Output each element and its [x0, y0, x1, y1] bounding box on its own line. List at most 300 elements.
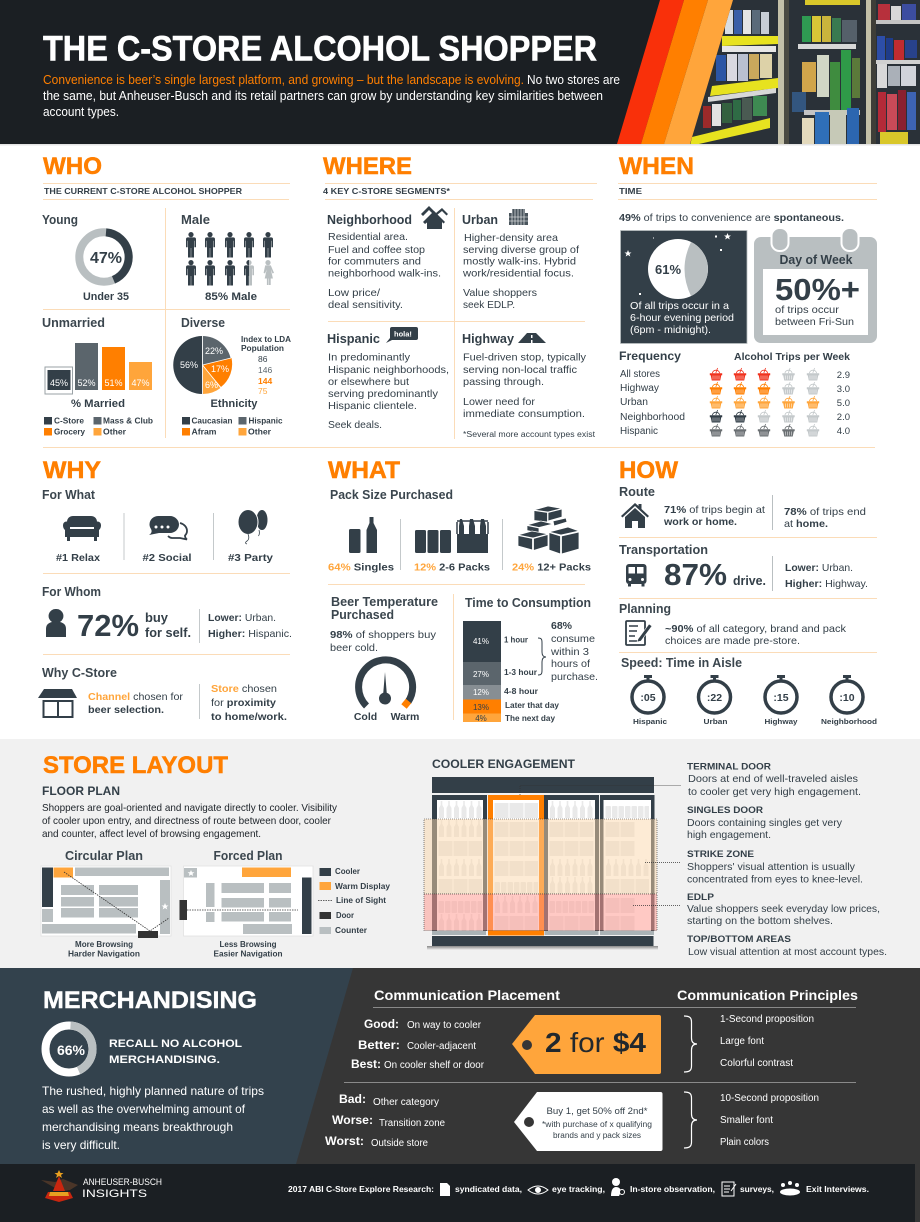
male pictogram: Male: [181, 213, 210, 227]
forced plan: Forced Plan: [214, 849, 282, 863]
icon: chat bubbles: [149, 516, 187, 540]
time to consumption: Time to Consumption: [465, 596, 591, 610]
bar chart: percent married: Unmarried: [42, 316, 105, 330]
icon: house: [621, 503, 649, 528]
calendar card: of trips occur: [775, 304, 840, 316]
intro text: Convenience is beer’s single largest platform, and growing – but the landscape is evolving.: [43, 72, 524, 87]
segment: urban: Value shoppers: [463, 288, 537, 299]
segment: urban: seek EDLP.: [463, 300, 515, 311]
calendar card: Day of Week: [780, 253, 853, 267]
time to consumption: The next day: [505, 714, 556, 723]
cooler callouts: TOP/BOTTOM AREAS: [687, 934, 791, 945]
segment: hispanic: [327, 327, 449, 431]
speed: time in aisle: :05: [640, 692, 656, 704]
heading: store layout: STORE LAYOUT: [43, 752, 228, 779]
panel: store layout: [0, 739, 920, 968]
icon: sofa: [63, 516, 101, 541]
stripe: light orange: [664, 0, 733, 144]
beer temperature: beer cold.: [330, 642, 378, 654]
frequency table: 5.0: [837, 398, 850, 409]
beer temperature: [330, 595, 438, 723]
route: at home.: [784, 518, 828, 530]
merchandising text: is very difficult.: [42, 1138, 120, 1152]
segment: highway: serving non-local traffic: [463, 365, 577, 376]
cooler callouts: Doors containing singles get very: [687, 818, 843, 829]
cooler callouts: TERMINAL DOOR: [687, 762, 771, 772]
panel: merchandising: [0, 968, 920, 1222]
segment: neighborhood: deal sensitivity.: [328, 300, 403, 311]
research sources: surveys,: [740, 1185, 774, 1194]
panel: WHY: For What: [42, 488, 96, 502]
young donut: 47%: [90, 250, 122, 267]
legend: Other: [103, 428, 126, 436]
panel: WHO: [42, 153, 291, 438]
segment: highway: Highway: [462, 331, 515, 346]
segment: hispanic: Hispanic clientele.: [328, 401, 417, 412]
evening card: (6pm - midnight).: [630, 324, 711, 336]
pie chart: ethnicity: Diverse: [181, 316, 225, 330]
icon: observer: [611, 1178, 624, 1196]
young donut: [42, 213, 129, 303]
route: Route: [619, 485, 655, 499]
icon: bus: [626, 564, 646, 586]
shelves: door 3: [549, 800, 594, 931]
pie chart: ethnicity: 56%: [180, 360, 198, 370]
planning: [619, 602, 847, 647]
spontaneous stat: 49% of trips to convenience are spontaneous.: [619, 212, 844, 224]
cooler callouts: Shoppers' visual attention is usually: [687, 862, 856, 873]
segment: neighborhood: Neighborhood: [327, 212, 412, 227]
icon: storefront: [38, 689, 77, 717]
stacked bar: 13%: [473, 703, 489, 712]
panel: WHAT: 24% 12+ Packs: [512, 562, 591, 574]
segment: neighborhood: for commuters and: [328, 256, 421, 268]
speed: time in aisle: Highway: [764, 717, 798, 726]
panel: WHAT: [328, 457, 598, 723]
strike zone overlay: [424, 819, 657, 894]
panel: WHEN: [618, 153, 877, 437]
heading: WHEN: WHEN: [619, 153, 694, 180]
intro text: No two stores are: [527, 72, 620, 87]
icon: balloons: [238, 510, 268, 544]
cooler callouts: [687, 762, 887, 958]
legend: [44, 416, 153, 436]
forced plan: Less Browsing: [220, 940, 277, 949]
cooler callouts: Doors at end of well-traveled aisles: [688, 774, 858, 785]
transportation: Transportation: [619, 543, 708, 557]
floor plan description: of cooler upon entry, and directness of route between door, cooler: [42, 816, 332, 827]
bad placement list: Bad:: [339, 1092, 366, 1106]
bar chart: percent married: 45%: [50, 378, 68, 388]
cooler callouts: starting on the bottom shelves.: [687, 916, 833, 927]
frequency table: Alcohol Trips per Week: [734, 352, 850, 363]
principles: weak: [720, 1093, 819, 1148]
heading: WHY: WHY: [43, 457, 101, 484]
segment: hispanic: In predominantly: [328, 352, 411, 364]
transportation: Higher: Highway.: [785, 578, 868, 590]
speed: time in aisle: Hispanic: [633, 717, 667, 726]
legend: Grocery: [54, 428, 86, 436]
principles: strong: Colorful contrast: [720, 1058, 793, 1069]
legend: Caucasian: [192, 416, 233, 426]
principles: strong: [720, 1014, 814, 1069]
why c-store: Store chosen: [211, 683, 277, 695]
time to consumption: 68%: [551, 620, 573, 632]
photo of cooler doors: [685, 0, 920, 146]
time to consumption: 1-3 hour: [504, 668, 537, 677]
for whom: Higher: Hispanic.: [208, 628, 292, 640]
white price tag: [514, 1092, 662, 1151]
cooler callouts: concentrated from eyes to knee-level.: [687, 874, 863, 886]
panel: HOW: [619, 457, 877, 726]
edlp overlay: [424, 894, 657, 930]
why c-store: [38, 666, 287, 723]
frequency table: [619, 349, 850, 437]
subheading: 4 KEY C-STORE SEGMENTS*: [323, 186, 451, 196]
time to consumption: hours of: [551, 658, 590, 670]
panel: WHY: #3 Party: [228, 552, 273, 564]
good placement list: [351, 1017, 485, 1071]
research sources: eye tracking,: [552, 1185, 605, 1194]
donut: 66%: [46, 1026, 93, 1072]
pie chart: ethnicity: 6%: [205, 380, 218, 390]
heading: WHAT: WHAT: [328, 457, 400, 484]
cooler callouts: Value shoppers seek everyday low prices,: [687, 904, 880, 915]
legend: Other: [248, 428, 271, 436]
legend: [182, 416, 283, 436]
recall stat: MERCHANDISING.: [109, 1054, 220, 1066]
icon: checklist: [626, 621, 652, 645]
leader lines: [520, 786, 681, 906]
segment: highway: *Several more account types exist: [463, 430, 596, 439]
panel: WHAT: Pack Size Purchased: [330, 488, 453, 502]
orange price tag: 2 for $4: [545, 1027, 646, 1058]
why c-store: Why C-Store: [42, 666, 117, 680]
route: [619, 485, 866, 530]
why c-store: Channel chosen for: [88, 691, 184, 703]
logo: [41, 1170, 78, 1202]
segment: highway: [462, 331, 596, 439]
time to consumption: Later that day: [505, 701, 560, 710]
segment: urban: Urban: [462, 212, 498, 227]
beer temperature: Cold: [354, 711, 377, 723]
plan legend: Cooler: [335, 867, 360, 876]
icon: person: [46, 609, 66, 637]
calendar card: between Fri-Sun: [775, 316, 854, 328]
header banner: [0, 0, 920, 146]
pie chart: ethnicity: 75: [258, 386, 268, 396]
panel: WHY: #1 Relax: [56, 552, 100, 564]
segment: urban: [462, 209, 579, 311]
segment: neighborhood: Fuel and coffee stop: [328, 245, 425, 256]
good placement list: On way to cooler: [407, 1020, 482, 1031]
stripe: red: [617, 0, 684, 144]
pie chart: ethnicity: 144: [258, 376, 272, 386]
intro text: [43, 72, 620, 119]
good placement list: Better:: [358, 1038, 400, 1052]
pie chart: ethnicity: Population: [241, 344, 284, 353]
shelves: door 4: [605, 800, 649, 931]
time to consumption: 1 hour: [504, 636, 528, 644]
brace: [538, 638, 546, 675]
speed: time in aisle: Neighborhood: [821, 717, 877, 726]
beer temperature: Purchased: [331, 608, 394, 622]
merchandising text: [42, 1084, 264, 1152]
young donut: Young: [42, 213, 78, 227]
for whom: [42, 585, 292, 643]
speed: time in aisle: :22: [707, 692, 722, 704]
segment: highway: passing through.: [463, 377, 544, 388]
basket rows: [710, 368, 819, 436]
planning: ~90% of all category, brand and pack: [665, 623, 847, 635]
merchandising text: The rushed, highly planned nature of trips: [42, 1084, 264, 1098]
speed: time in aisle: Speed: Time in Aisle: [621, 656, 742, 670]
research sources: Exit Interviews.: [806, 1185, 869, 1194]
time to consumption: consume: [551, 633, 595, 645]
segment: urban: work/residential focus.: [462, 268, 574, 280]
segment: neighborhood: Low price/: [328, 288, 380, 299]
icon: can and bottle: [349, 517, 377, 553]
heading: HOW: HOW: [619, 457, 678, 484]
orange price tag: [512, 1015, 661, 1074]
cooler callouts: to cooler get very high engagement.: [688, 787, 861, 798]
time to consumption: [463, 596, 598, 723]
planning: choices are made pre-store.: [665, 635, 800, 647]
frequency table: All stores: [620, 369, 660, 380]
logo text: [82, 1177, 162, 1200]
calendar card: [754, 228, 877, 343]
cooler callouts: EDLP: [687, 892, 715, 903]
segment: neighborhood: Residential area.: [328, 232, 408, 243]
logo text: INSIGHTS: [82, 1188, 147, 1200]
white price tag: Buy 1, get 50% off 2nd*: [546, 1106, 648, 1117]
segment: neighborhood: [327, 206, 448, 311]
route: 78% of trips end: [784, 506, 866, 518]
frequency table: 2.9: [837, 370, 850, 381]
cooler callouts: Low visual attention at most account types.: [688, 947, 887, 958]
icon: houses: [421, 206, 448, 229]
bar chart: percent married: 47%: [131, 378, 150, 388]
intro text: the same, but Anheuser-Busch and its retail partners can grow by understanding key similarities between: [43, 88, 603, 103]
pie chart: ethnicity: Index to LDA: [241, 335, 291, 344]
bad placement list: Outside store: [371, 1138, 428, 1149]
icon: survey: [722, 1182, 736, 1196]
segment: hispanic: Hispanic neighborhoods,: [328, 365, 449, 376]
panel: WHAT: 12% 2-6 Packs: [414, 562, 490, 574]
frequency table: Urban: [620, 397, 648, 408]
stripe: orange: [641, 0, 708, 144]
braces: [684, 1016, 697, 1148]
good placement list: Best:: [351, 1057, 381, 1071]
legend: Mass & Club: [103, 416, 153, 426]
icon: speech bubble: hola!: [394, 330, 412, 338]
cooler diagram: [424, 777, 658, 950]
legend: C-Store: [54, 416, 85, 426]
principles: weak: Plain colors: [720, 1137, 769, 1148]
principles: strong: Large font: [720, 1036, 764, 1047]
segment: highway: immediate consumption.: [463, 409, 585, 420]
forced plan: Easier Navigation: [214, 950, 283, 958]
subheading: THE CURRENT C-STORE ALCOHOL SHOPPER: [44, 186, 242, 196]
merchandising text: merchandising means breakthrough: [42, 1120, 233, 1134]
evening card: [620, 230, 747, 344]
why c-store: for proximity: [211, 697, 276, 709]
speed: time in aisle: :15: [773, 692, 789, 704]
speed: time in aisle: [621, 656, 877, 726]
bad placement list: [325, 1092, 445, 1149]
pie chart: ethnicity: Ethnicity: [210, 398, 258, 410]
principles: strong: 1-Second proposition: [720, 1014, 814, 1025]
panel: WHERE: [323, 153, 597, 439]
stacked bar: 41%: [473, 637, 489, 646]
time to consumption: purchase.: [551, 671, 598, 683]
evening card: 61%: [655, 262, 681, 277]
pie chart: ethnicity: 86: [258, 354, 268, 364]
plan legend: Door: [336, 911, 354, 920]
route: 71% of trips begin at: [664, 504, 765, 516]
good placement list: Cooler-adjacent: [407, 1041, 476, 1052]
circular plan: Harder Navigation: [68, 950, 140, 958]
bad placement list: Transition zone: [379, 1118, 445, 1129]
bar chart: percent married: 52%: [77, 378, 96, 388]
segment: hispanic: Seek deals.: [328, 420, 382, 431]
plan legend: Warm Display: [335, 882, 391, 891]
donut: 66%: 66%: [57, 1042, 86, 1058]
research sources: [288, 1178, 869, 1196]
time to consumption: within 3: [550, 646, 589, 658]
stacked bar: [463, 621, 501, 723]
time to consumption: 4-8 hour: [504, 687, 538, 696]
for whom: for self.: [145, 625, 191, 640]
frequency table: 4.0: [837, 426, 850, 437]
why c-store: beer selection.: [88, 704, 164, 716]
frequency table: 2.0: [837, 412, 850, 423]
plan legend: [318, 867, 391, 935]
merchandising text: as well as the overwhelming amount of: [42, 1102, 246, 1116]
pie chart: ethnicity: 22%: [205, 346, 223, 356]
cooler callouts: high engagement.: [687, 830, 771, 841]
icon: document: [440, 1183, 450, 1196]
title: THE C-STORE ALCOHOL SHOPPER: [43, 30, 597, 68]
segment: urban: Higher-density area: [464, 233, 558, 244]
white price tag: *with purchase of x qualifying: [542, 1120, 652, 1129]
panel: WHY: [38, 457, 292, 723]
beer temperature: Beer Temperature: [331, 595, 438, 609]
floor plan description: and counter, affect level of browsing engagement.: [42, 829, 261, 840]
segment: hispanic: Hispanic: [327, 331, 380, 346]
male pictogram: 85% Male: [205, 291, 257, 303]
singles door highlight: [490, 798, 542, 933]
icon: stacked cases: [518, 506, 579, 554]
bad placement list: Worse:: [332, 1113, 373, 1127]
transportation: drive.: [733, 573, 766, 588]
stacked bar: 27%: [473, 670, 489, 679]
frequency table: Hispanic: [620, 426, 658, 437]
stacked bar: 12%: [473, 688, 489, 697]
research sources: syndicated data,: [455, 1185, 522, 1194]
intro text: account types.: [43, 104, 119, 119]
icon: building: [509, 209, 528, 225]
transportation: 87%: [664, 557, 727, 592]
good placement list: Good:: [364, 1017, 399, 1031]
research sources: In-store observation,: [630, 1185, 715, 1194]
panel: WHAT: 64% Singles: [328, 562, 394, 574]
evening card: Of all trips occur in a: [630, 300, 729, 312]
heading: merchandising: MERCHANDISING: [43, 987, 257, 1014]
segment: hispanic: or elsewhere but: [328, 377, 409, 388]
segment: highway: Lower need for: [463, 397, 536, 408]
icon: group: [780, 1181, 800, 1196]
recall stat: [109, 1038, 242, 1066]
for whom: 72%: [77, 608, 139, 643]
legend: Afram: [192, 428, 216, 436]
segment: neighborhood: neighborhood walk-ins.: [328, 268, 441, 280]
frequency table: Frequency: [619, 349, 681, 363]
footer: [0, 1164, 915, 1222]
stacked bar: 4%: [475, 714, 487, 723]
heading: WHO: WHO: [43, 153, 102, 180]
frequency table: Neighborhood: [620, 412, 685, 423]
heading: communication principles: Communication Principles: [677, 988, 858, 1003]
shelves: door 2: [494, 800, 538, 931]
heading: WHERE: WHERE: [323, 153, 412, 180]
logo text: ANHEUSER-BUSCH: [83, 1177, 162, 1187]
route: work or home.: [663, 516, 737, 528]
cooler callouts: STRIKE ZONE: [687, 849, 754, 860]
moon: [648, 239, 708, 299]
icon: road: [518, 333, 546, 343]
plan legend: Counter: [335, 926, 367, 935]
segment: hispanic: serving predominantly: [328, 389, 439, 400]
floor plan heading: FLOOR PLAN: [42, 784, 120, 798]
icon: eye: [528, 1186, 548, 1194]
circular plan: [41, 849, 171, 958]
frequency table: 3.0: [837, 384, 850, 395]
why c-store: to home/work.: [211, 711, 287, 723]
floor plan description: [42, 803, 338, 840]
evening card: 6-hour evening period: [630, 312, 734, 324]
male pictogram: [181, 213, 274, 303]
bar chart: percent married: 51%: [104, 378, 123, 388]
beer temperature: Warm: [391, 711, 419, 723]
frequency table: Highway: [620, 383, 659, 394]
pie chart: ethnicity: 17%: [211, 364, 229, 374]
beer temperature: 98% of shoppers buy: [330, 629, 437, 641]
circular plan: Circular Plan: [65, 849, 143, 863]
transportation: [619, 543, 868, 592]
icon: cans and six pack: [415, 519, 488, 553]
plan legend: Line of Sight: [336, 896, 386, 905]
shelves: door 1: [438, 800, 482, 931]
pie chart: ethnicity: 146: [258, 365, 272, 375]
panel: WHY: #2 Social: [142, 552, 192, 564]
young donut: Under 35: [83, 291, 129, 303]
white price tag: brands and y pack sizes: [553, 1131, 641, 1140]
legend: Hispanic: [248, 416, 283, 426]
speed: time in aisle: Urban: [704, 717, 728, 726]
gauge: [359, 660, 413, 706]
bar chart: percent married: % Married: [71, 398, 125, 410]
for whom: buy: [145, 610, 169, 625]
transportation: Lower: Urban.: [785, 562, 853, 574]
subheading: TIME: [619, 186, 642, 196]
planning: Planning: [619, 602, 671, 616]
segment: highway: Fuel-driven stop, typically: [463, 352, 587, 364]
calendar card: 50%+: [775, 272, 860, 307]
forced plan: [180, 849, 313, 958]
cooler callouts: SINGLES DOOR: [687, 805, 763, 816]
segment: urban: serving diverse group of: [463, 245, 579, 256]
